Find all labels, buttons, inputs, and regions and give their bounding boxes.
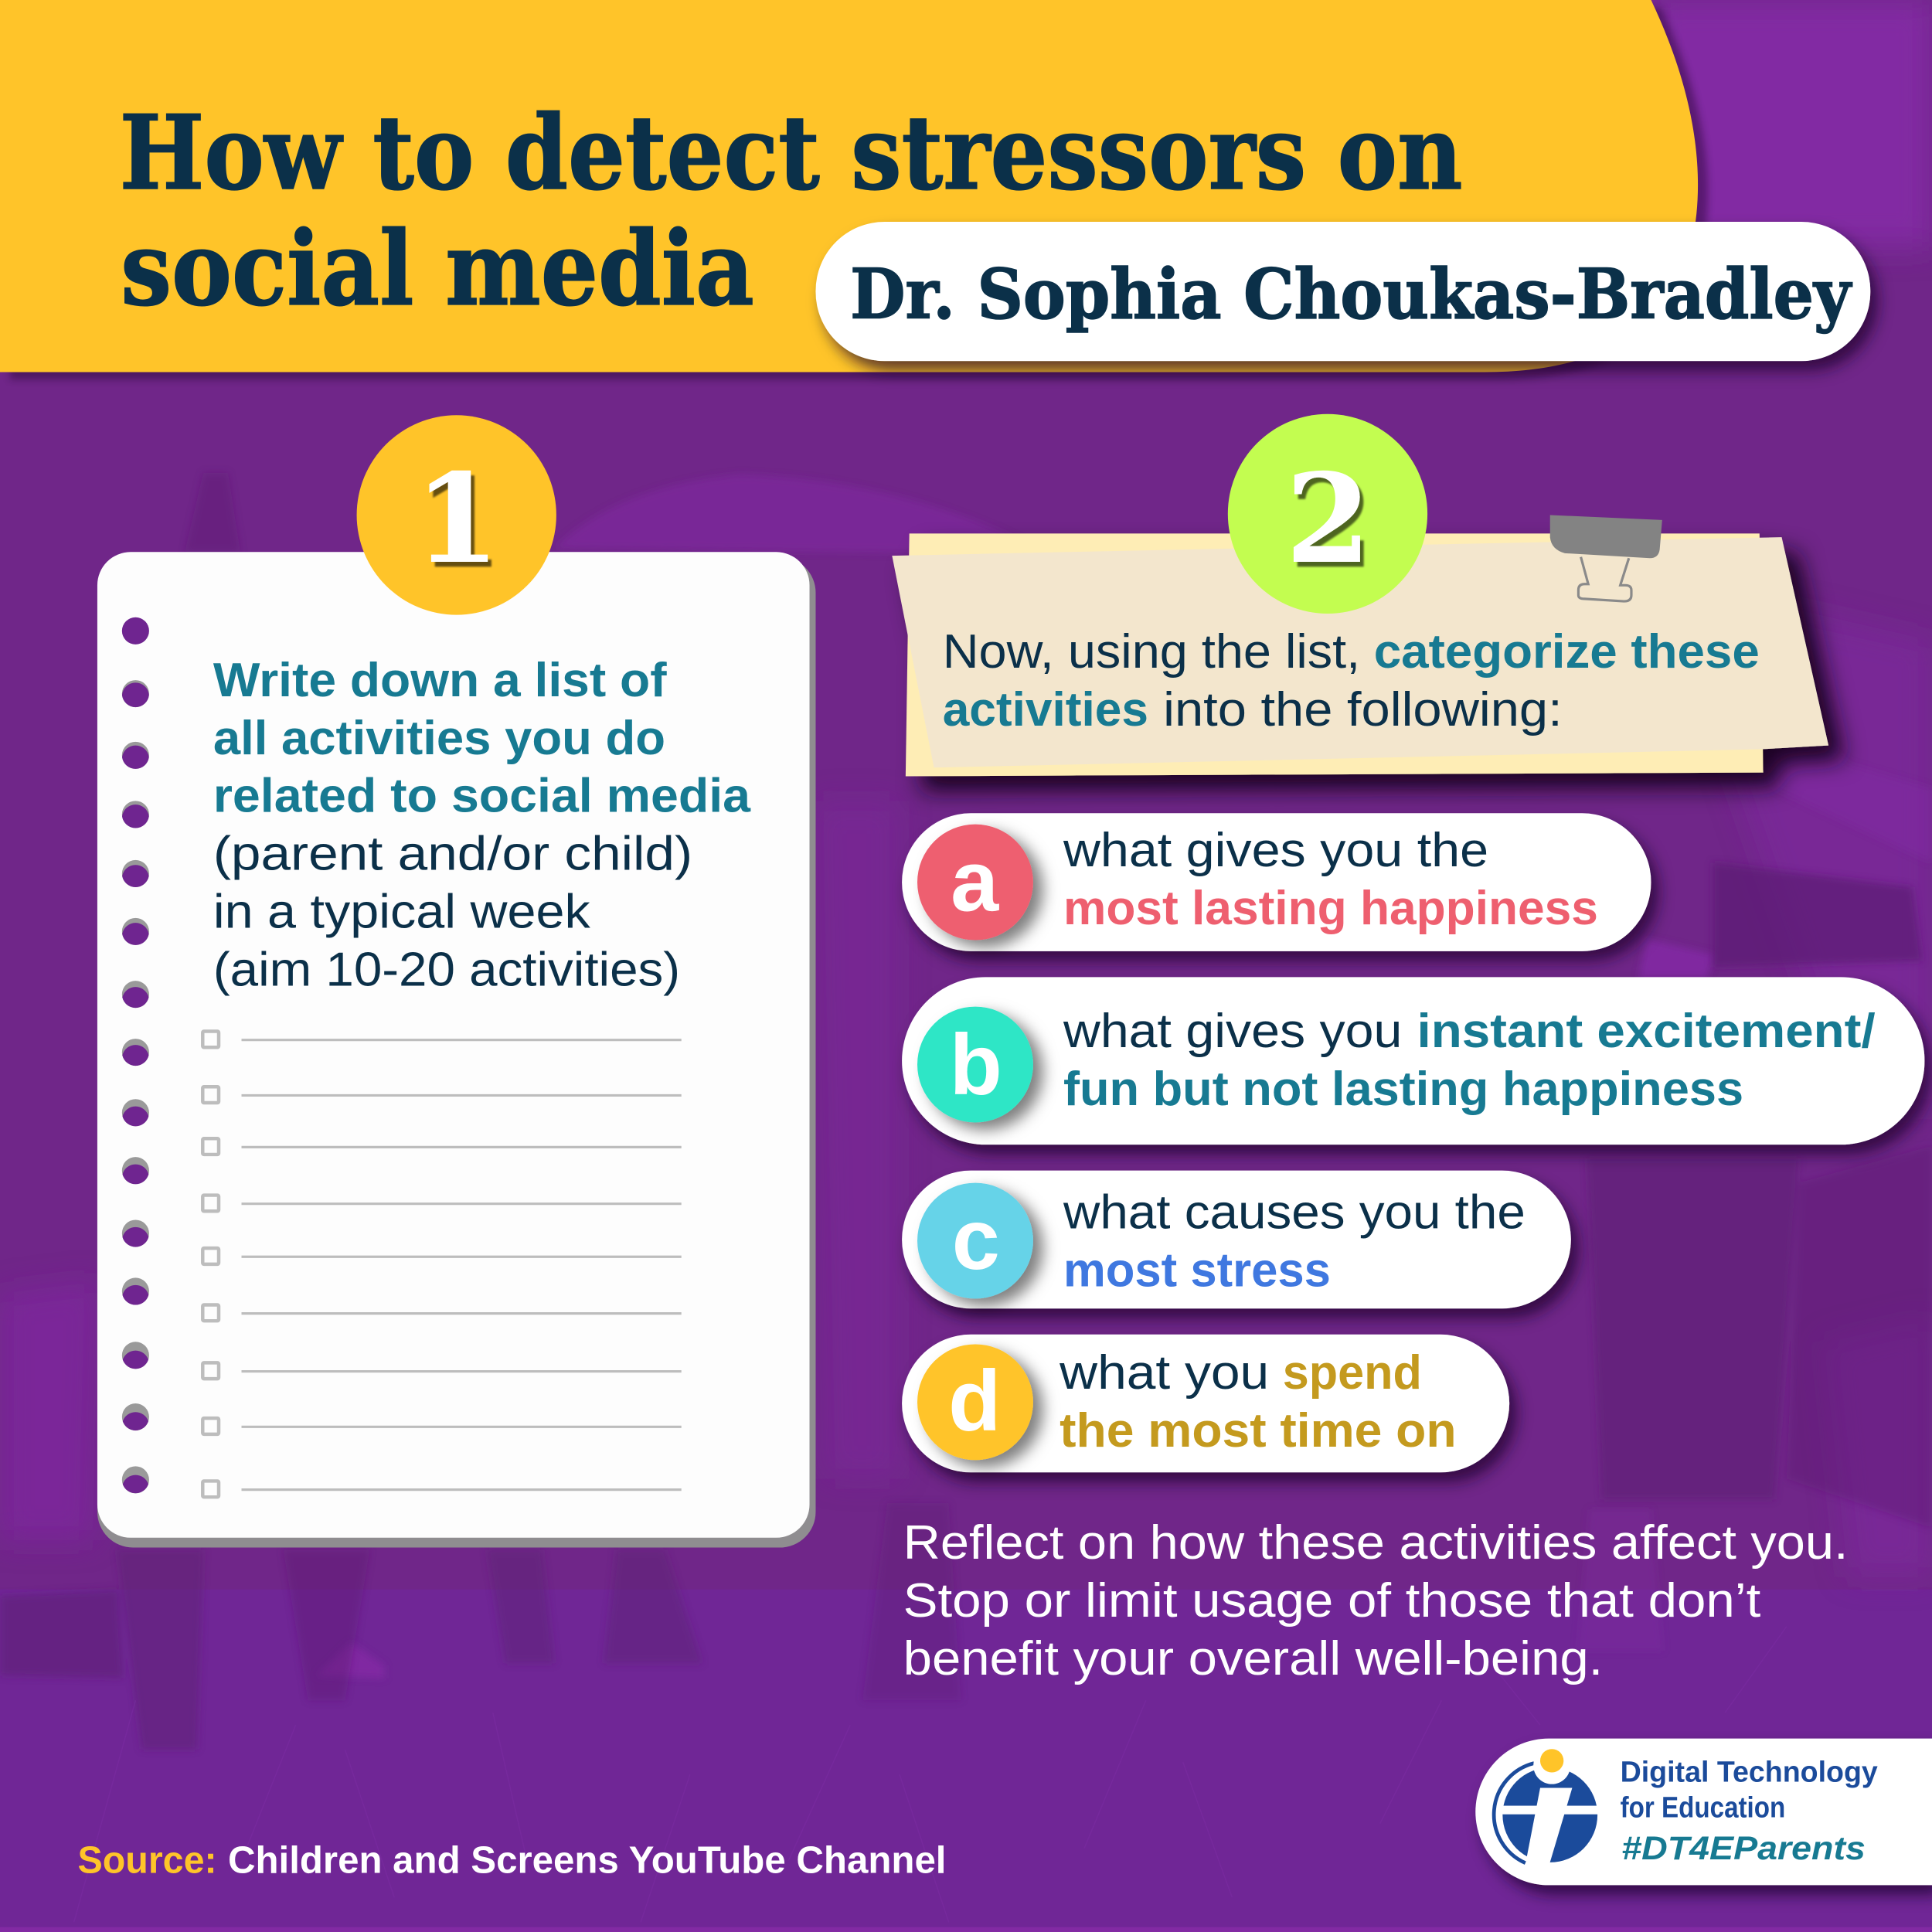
option a: a <box>951 832 999 929</box>
step 2 number badge <box>1228 414 1427 614</box>
source line: Children and Screens YouTube Channel <box>228 1838 946 1881</box>
icon: DT4E logo <box>1494 1747 1603 1864</box>
step 1 instructions: in a typical week <box>213 886 591 939</box>
option d: what you <box>1059 1346 1269 1400</box>
checklist <box>202 1032 682 1497</box>
step 1 instructions: Write down a list of <box>213 654 667 707</box>
step 1 instructions: (aim 10-20 activities) <box>213 944 680 997</box>
step 1 instructions: related to social media <box>213 770 750 823</box>
panel: sticky note step 2 <box>892 533 1828 776</box>
option c: most stress <box>1063 1244 1331 1298</box>
title: How to detect stressors on <box>120 94 1463 213</box>
step 1 number badge: 1 <box>414 446 500 591</box>
step 1 instructions: all activities you do <box>213 712 665 765</box>
step 2 number badge: 2 <box>1285 446 1371 591</box>
notebook binding holes <box>122 617 149 1493</box>
option d: spend <box>1283 1346 1422 1400</box>
logo text <box>1621 1755 1879 1867</box>
option a: what gives you the <box>1063 824 1488 877</box>
title <box>120 94 1463 329</box>
presenter name pill: Dr. Sophia Choukas-Bradley <box>850 253 1852 335</box>
header banner <box>0 0 1708 379</box>
option b <box>902 977 1924 1145</box>
step 1 instructions: (parent and/or child) <box>213 828 692 881</box>
option d: d <box>948 1352 1001 1449</box>
option b: instant excitement/ <box>1417 1005 1876 1058</box>
reflection text <box>903 1516 1849 1685</box>
step 2 instructions: Now, using the list, <box>943 625 1360 679</box>
logo badge <box>1475 1739 1932 1885</box>
step 2 instructions <box>943 625 1760 736</box>
option b: fun but not lasting happiness <box>1063 1063 1743 1116</box>
step 1 instructions <box>213 654 750 997</box>
logo text: #DT4EParents <box>1621 1830 1866 1867</box>
option c: what causes you the <box>1063 1186 1526 1240</box>
step 1 number badge <box>357 415 556 615</box>
logo text: for Education <box>1621 1791 1785 1825</box>
option c <box>902 1171 1571 1308</box>
icon: binder clip <box>1550 515 1662 601</box>
logo text: Digital Technology <box>1621 1755 1879 1788</box>
step 2 instructions: into the following: <box>1163 683 1563 736</box>
source line: Source: <box>77 1838 217 1881</box>
title: social media <box>121 209 754 329</box>
option b: what gives you <box>1063 1005 1402 1058</box>
step 2 instructions: activities <box>943 683 1148 736</box>
option d <box>902 1335 1509 1472</box>
presenter name pill <box>815 222 1870 361</box>
panel: notebook step 1 <box>97 552 815 1548</box>
option a: most lasting happiness <box>1063 882 1598 935</box>
option b: b <box>950 1016 1002 1113</box>
step 2 instructions: categorize these <box>1374 625 1760 679</box>
option c: c <box>952 1191 1000 1287</box>
reflection text: Reflect on how these activities affect you. <box>903 1516 1849 1570</box>
option a <box>902 813 1651 951</box>
reflection text: Stop or limit usage of those that don’t <box>903 1574 1760 1628</box>
option d: the most time on <box>1060 1404 1457 1458</box>
reflection text: benefit your overall well-being. <box>903 1632 1603 1685</box>
